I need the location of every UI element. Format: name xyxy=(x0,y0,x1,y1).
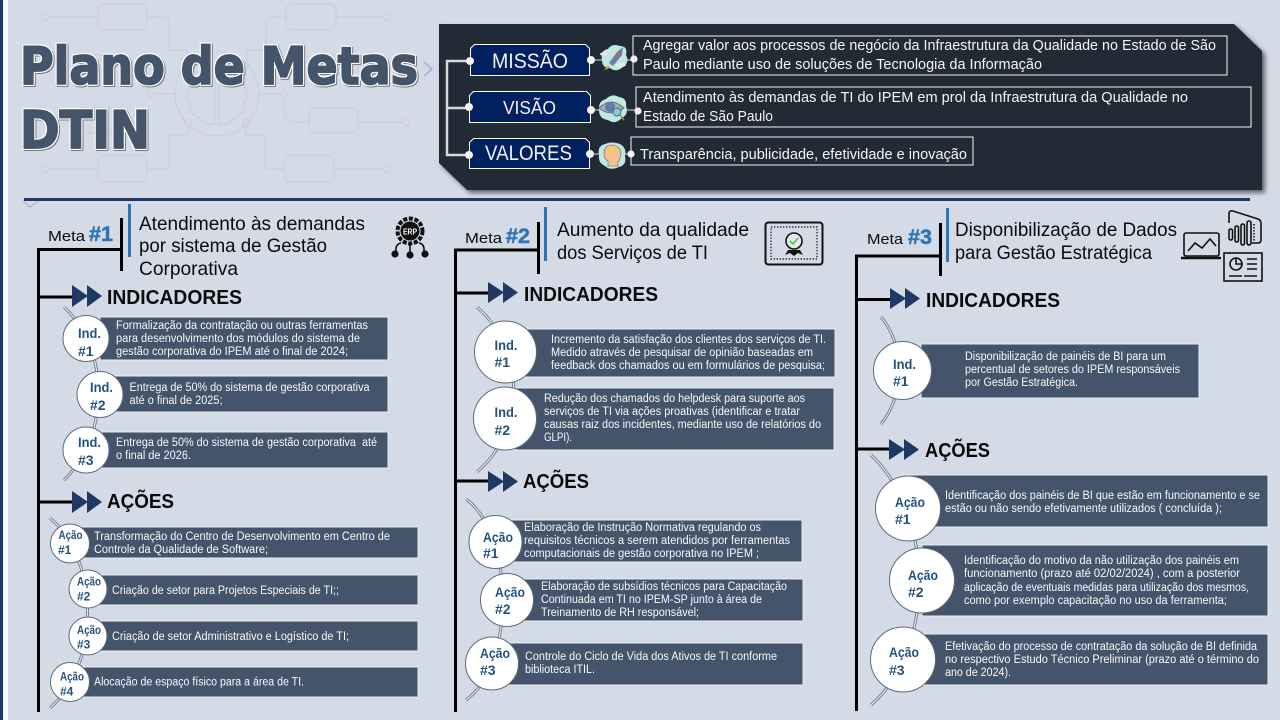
action 3: Ação xyxy=(480,645,510,661)
action 1: Identificação dos painéis de BI que estão em funcionamento e se xyxy=(945,490,1260,502)
heading: meta 3 title xyxy=(955,220,1177,264)
icon: laptop with chart xyxy=(1181,233,1221,258)
arrows: indicadores xyxy=(72,285,102,307)
indicator 1: Medido através de pesquisar de opinião baseadas em xyxy=(551,347,813,359)
arrows: indicadores xyxy=(890,288,920,309)
heading: ações: AÇÕES xyxy=(523,469,589,493)
heading: indicadores: INDICADORES xyxy=(524,283,658,306)
action 3: Efetivação do processo de contratação da solução de BI definida xyxy=(945,641,1258,653)
action 2: Ação xyxy=(77,574,101,588)
heading: ações: AÇÕES xyxy=(925,438,990,462)
action 1: Ação xyxy=(58,528,82,542)
text box: visão: Atendimento às demandas de TI do IPEM em prol da Infraestrutura da Qualidade no xyxy=(643,89,1188,106)
action 1 xyxy=(876,475,1268,541)
text box: visão: Estado de São Paulo xyxy=(643,108,773,125)
action 2: Elaboração de subsídios técnicos para Capacitação xyxy=(541,581,787,593)
arrows: ações xyxy=(488,471,518,492)
action 2: Criação de setor para Projetos Especiais de TI;; xyxy=(112,585,339,597)
action 3: Criação de setor Administrativo e Logístico de TI; xyxy=(112,631,349,643)
action 2: Treinamento de RH responsável; xyxy=(541,607,699,619)
box: visão: VISÃO xyxy=(503,97,556,118)
heading: meta 1 title xyxy=(139,214,365,280)
heading: meta 2 title: dos Serviços de TI xyxy=(557,243,708,264)
indicator 3: o final de 2026. xyxy=(116,450,191,462)
indicator 3: #3 xyxy=(78,452,94,468)
indicator 1: Ind. xyxy=(494,337,518,353)
action 1: Transformação do Centro de Desenvolvimento em Centro de xyxy=(94,531,390,543)
icon: ERP gear xyxy=(391,219,429,259)
indicator 2: #2 xyxy=(90,397,106,413)
indicator 1: gestão corporativa do IPEM até o final de 2024; xyxy=(116,346,348,358)
box: missão xyxy=(466,44,595,76)
panel: meta 1 xyxy=(38,204,429,712)
indicator 1: Disponibilização de painéis de BI para um xyxy=(965,351,1166,363)
indicator 2: Entrega de 50% do sistema de gestão corporativa xyxy=(130,382,370,394)
action 2: #2 xyxy=(495,601,511,617)
icon: ERP gear: ERP xyxy=(403,228,418,236)
action 1: estão ou não sendo efetivamente utilizados ( concluída ); xyxy=(945,503,1222,515)
action 3: Ação xyxy=(77,623,101,637)
indicator 1: #1 xyxy=(494,354,510,370)
indicator 2: GLPI). xyxy=(544,432,572,444)
text box: valores: Transparência, publicidade, efetividade e inovação xyxy=(640,146,967,163)
title: Plano de Metas DTIN: DTIN xyxy=(20,101,150,161)
action 3: #3 xyxy=(480,662,496,678)
panel: missão, visão, valores xyxy=(439,24,1262,190)
arrows: ações xyxy=(889,439,919,460)
action 1: Ação xyxy=(895,494,925,510)
indicator 1 xyxy=(874,342,1199,400)
arrows: indicadores xyxy=(488,282,518,303)
indicator 2: Redução dos chamados do helpdesk para suporte aos xyxy=(544,393,805,405)
action 1: requisitos técnicos a serem atendidos por ferramentas xyxy=(524,535,790,547)
action 4: #4 xyxy=(60,684,74,698)
heading: meta 2 title: Aumento da qualidade xyxy=(557,220,749,241)
indicator 1 xyxy=(63,316,388,362)
box: valores xyxy=(465,138,594,168)
text box: missão xyxy=(633,36,1227,75)
title: Plano de Metas DTIN xyxy=(20,37,418,161)
box: missão: MISSÃO xyxy=(492,48,568,73)
icon: power bi xyxy=(1229,211,1261,245)
action 2: #2 xyxy=(77,590,91,604)
text box: missão: Paulo mediante uso de soluções de Tecnologia da Informação xyxy=(643,56,1042,73)
heading: meta 2 number: #2 xyxy=(506,225,530,248)
action 2: Identificação do motivo da não utilização dos painéis em xyxy=(964,555,1239,567)
heading: meta 3 number xyxy=(867,226,932,249)
action 1: computacionais de gestão corporativa no IPEM ; xyxy=(524,548,759,560)
indicator 1: #1 xyxy=(893,373,909,389)
arc: indicadores xyxy=(881,317,899,424)
action 1 xyxy=(50,524,418,563)
action 3 xyxy=(466,637,803,690)
action 3: Controle do Ciclo de Vida dos Ativos de TI conforme xyxy=(525,651,777,663)
indicator 2: causas raiz dos incidentes, mediante uso de relatórios do xyxy=(544,419,821,431)
icon: chevron xyxy=(424,62,432,76)
heading: meta 2 title xyxy=(557,220,749,264)
action 2: aplicação de eventuais medidas para utilização dos mesmos, xyxy=(964,582,1249,594)
divider rule xyxy=(23,198,1250,207)
heading: meta 1 title: por sistema de Gestão xyxy=(139,236,327,257)
indicator 2: #2 xyxy=(494,422,510,438)
action 2: funcionamento (prazo até 02/02/2024) , com a posterior xyxy=(964,568,1240,580)
indicator 1: Formalização da contratação ou outras ferramentas xyxy=(116,320,368,332)
heading: indicadores: INDICADORES xyxy=(926,289,1060,312)
action 1: #1 xyxy=(895,511,911,527)
heading: meta 2 number xyxy=(465,225,530,248)
arc: ações xyxy=(871,455,919,705)
heading: indicadores: INDICADORES xyxy=(107,286,242,309)
heading: meta 1 number: Meta xyxy=(48,228,86,245)
icon: head with lightbulb xyxy=(594,142,635,169)
action 4: Alocação de espaço físico para a área de TI. xyxy=(94,676,304,688)
text box: visão xyxy=(636,87,1251,127)
indicator 3: Ind. xyxy=(78,434,101,450)
indicator 1: Incremento da satisfação dos clientes dos serviços de TI. xyxy=(551,334,826,346)
action 1 xyxy=(469,516,802,568)
indicator 2: Ind. xyxy=(494,404,518,420)
indicator 1: Ind. xyxy=(78,325,101,341)
action 2 xyxy=(480,574,803,626)
heading: meta 2 number: Meta xyxy=(465,230,503,247)
action 1: #1 xyxy=(483,545,499,561)
action 4 xyxy=(50,662,418,702)
action 3: #3 xyxy=(77,638,91,652)
action 1: #1 xyxy=(58,543,72,557)
indicator 2 xyxy=(77,372,388,418)
action 2: como por exemplo capacitação no uso da ferramenta; xyxy=(964,595,1227,607)
indicator 1 xyxy=(474,321,835,383)
action 1: Elaboração de Instrução Normativa regulando os xyxy=(524,522,761,534)
action 2: Ação xyxy=(495,584,525,600)
heading: meta 3 number: Meta xyxy=(867,231,904,248)
icon: eye xyxy=(595,95,642,122)
indicator 2: serviços de TI via ações proativas (identificar e tratar xyxy=(544,406,800,418)
action 3 xyxy=(69,617,418,655)
heading: meta 3 title: Disponibilização de Dados xyxy=(955,220,1177,241)
title: Plano de Metas DTIN: Plano de Metas xyxy=(20,37,418,97)
arc: indicadores xyxy=(477,307,514,472)
indicator 1: percentual de setores do IPEM responsáveis xyxy=(965,364,1180,376)
heading: meta 3 title: para Gestão Estratégica xyxy=(955,243,1152,264)
heading: meta 1 number: #1 xyxy=(89,223,113,246)
indicator 1: feedback dos chamados ou em formulários de pesquisa; xyxy=(551,360,825,372)
action 4: Ação xyxy=(60,670,84,684)
panel: meta 2 xyxy=(455,207,835,712)
indicator 3: Entrega de 50% do sistema de gestão corporativa até xyxy=(116,437,377,449)
arrows: ações xyxy=(72,491,102,513)
indicator 2: Ind. xyxy=(90,379,113,395)
heading: meta 1 title: Atendimento às demandas xyxy=(139,214,365,235)
icon: rocket xyxy=(595,45,638,70)
indicator 1: por Gestão Estratégica. xyxy=(965,377,1078,389)
action 3: Ação xyxy=(889,644,919,660)
indicator 1: Ind. xyxy=(893,356,916,372)
icon: certificate xyxy=(766,222,822,264)
text box: valores xyxy=(631,137,973,165)
action 3 xyxy=(870,627,1268,692)
action 3: #3 xyxy=(889,662,905,678)
indicator 3 xyxy=(63,427,388,473)
action 3: ano de 2024). xyxy=(945,667,1011,679)
indicator 2: até o final de 2025; xyxy=(130,395,222,407)
indicator 1: #1 xyxy=(78,343,94,359)
heading: ações: AÇÕES xyxy=(107,489,174,513)
action 2: #2 xyxy=(908,584,924,600)
action 2: Ação xyxy=(908,567,938,583)
arc: indicadores xyxy=(64,307,98,480)
action 3: biblioteca ITIL. xyxy=(525,664,595,676)
action 3: no respectivo Estudo Técnico Preliminar (prazo até o término do xyxy=(945,654,1259,666)
background: circuit brain pattern xyxy=(42,4,410,182)
indicator 1: para desenvolvimento dos módulos do sistema de xyxy=(116,333,360,345)
action 1: Ação xyxy=(483,529,513,545)
action 2: Continuada em TI no IPEM-SP junto à área de xyxy=(541,594,762,606)
heading: meta 1 title: Corporativa xyxy=(139,259,238,280)
action 2 xyxy=(890,545,1268,616)
box: valores: VALORES xyxy=(485,141,572,165)
action 2 xyxy=(69,570,418,608)
indicator 2 xyxy=(474,387,834,450)
box: visão xyxy=(465,92,595,122)
icon: dashboard card xyxy=(1224,253,1262,281)
arc: ações xyxy=(50,518,88,708)
arc: ações xyxy=(466,499,503,700)
heading: meta 1 number xyxy=(48,223,113,246)
text box: missão: Agregar valor aos processos de negócio da Infraestrutura da Qualidade no Estado de São xyxy=(643,37,1216,54)
action 1: Controle da Qualidade de Software; xyxy=(94,544,268,556)
panel: meta 3 xyxy=(856,208,1268,711)
heading: meta 3 number: #3 xyxy=(908,226,932,249)
